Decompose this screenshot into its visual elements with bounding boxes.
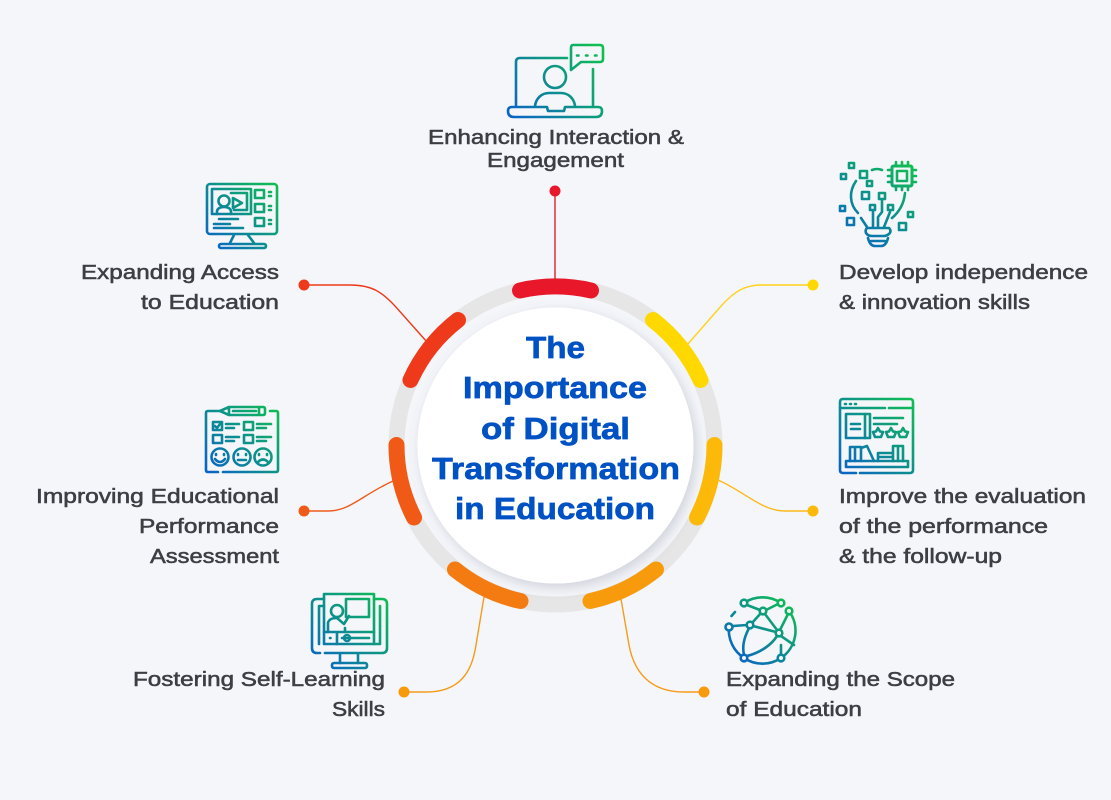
icon: checklist with smiley faces — [206, 407, 278, 472]
label — [36, 485, 279, 568]
label — [839, 261, 1088, 314]
label — [81, 261, 279, 314]
label: & innovation skills — [839, 291, 1030, 314]
title — [432, 331, 680, 526]
connector — [687, 280, 818, 345]
icon: laptop with video call — [508, 45, 603, 117]
connector — [550, 186, 560, 282]
icon: monitor with teacher — [312, 594, 387, 668]
label: Assessment — [150, 545, 279, 568]
connector — [398, 597, 484, 698]
label: Skills — [332, 698, 385, 721]
connector — [718, 480, 818, 516]
item: Improving Educational Performance Assessment — [36, 407, 393, 568]
coloured ring segments — [396, 286, 714, 601]
item: Develop independence & innovation skills — [687, 162, 1088, 345]
label — [428, 126, 684, 172]
label — [133, 668, 385, 721]
icon: web page with books and stars — [840, 399, 913, 473]
label: Improving Educational — [36, 485, 279, 508]
central ring diagram — [396, 286, 714, 604]
icon: monitor with video lesson — [207, 184, 277, 248]
item: Enhancing Interaction & Engagement — [428, 45, 684, 282]
label: Performance — [139, 515, 279, 538]
label: Expanding the Scope — [726, 668, 955, 691]
icon: network globe — [726, 597, 796, 664]
item: Fostering Self-Learning Skills — [133, 594, 484, 721]
connector — [298, 280, 427, 342]
label: Engagement — [487, 149, 624, 172]
label: of the performance — [839, 515, 1048, 538]
label: Develop independence — [839, 261, 1088, 284]
label — [726, 668, 955, 721]
item: Expanding Access to Education — [81, 184, 427, 342]
label: Enhancing Interaction & — [428, 126, 684, 149]
label: to Education — [141, 291, 279, 314]
item: Improve the evaluation of the performance & the follow-up — [718, 399, 1086, 568]
label: & the follow-up — [839, 545, 1002, 568]
white centre circle — [418, 308, 694, 584]
title: in Education — [455, 492, 655, 526]
label: Fostering Self-Learning — [133, 668, 385, 691]
label — [839, 485, 1086, 568]
connector — [621, 599, 710, 698]
title: of Digital — [481, 412, 630, 446]
label: of Education — [726, 698, 862, 721]
item: Expanding the Scope of Education — [621, 597, 955, 721]
label: Improve the evaluation — [839, 485, 1086, 508]
title: Transformation — [432, 452, 680, 486]
grey ring — [396, 286, 714, 604]
icon: light bulb with chip — [840, 162, 916, 246]
label: Expanding Access — [81, 261, 279, 284]
connector — [298, 481, 393, 516]
title: The — [526, 331, 585, 365]
title: Importance — [463, 371, 647, 405]
